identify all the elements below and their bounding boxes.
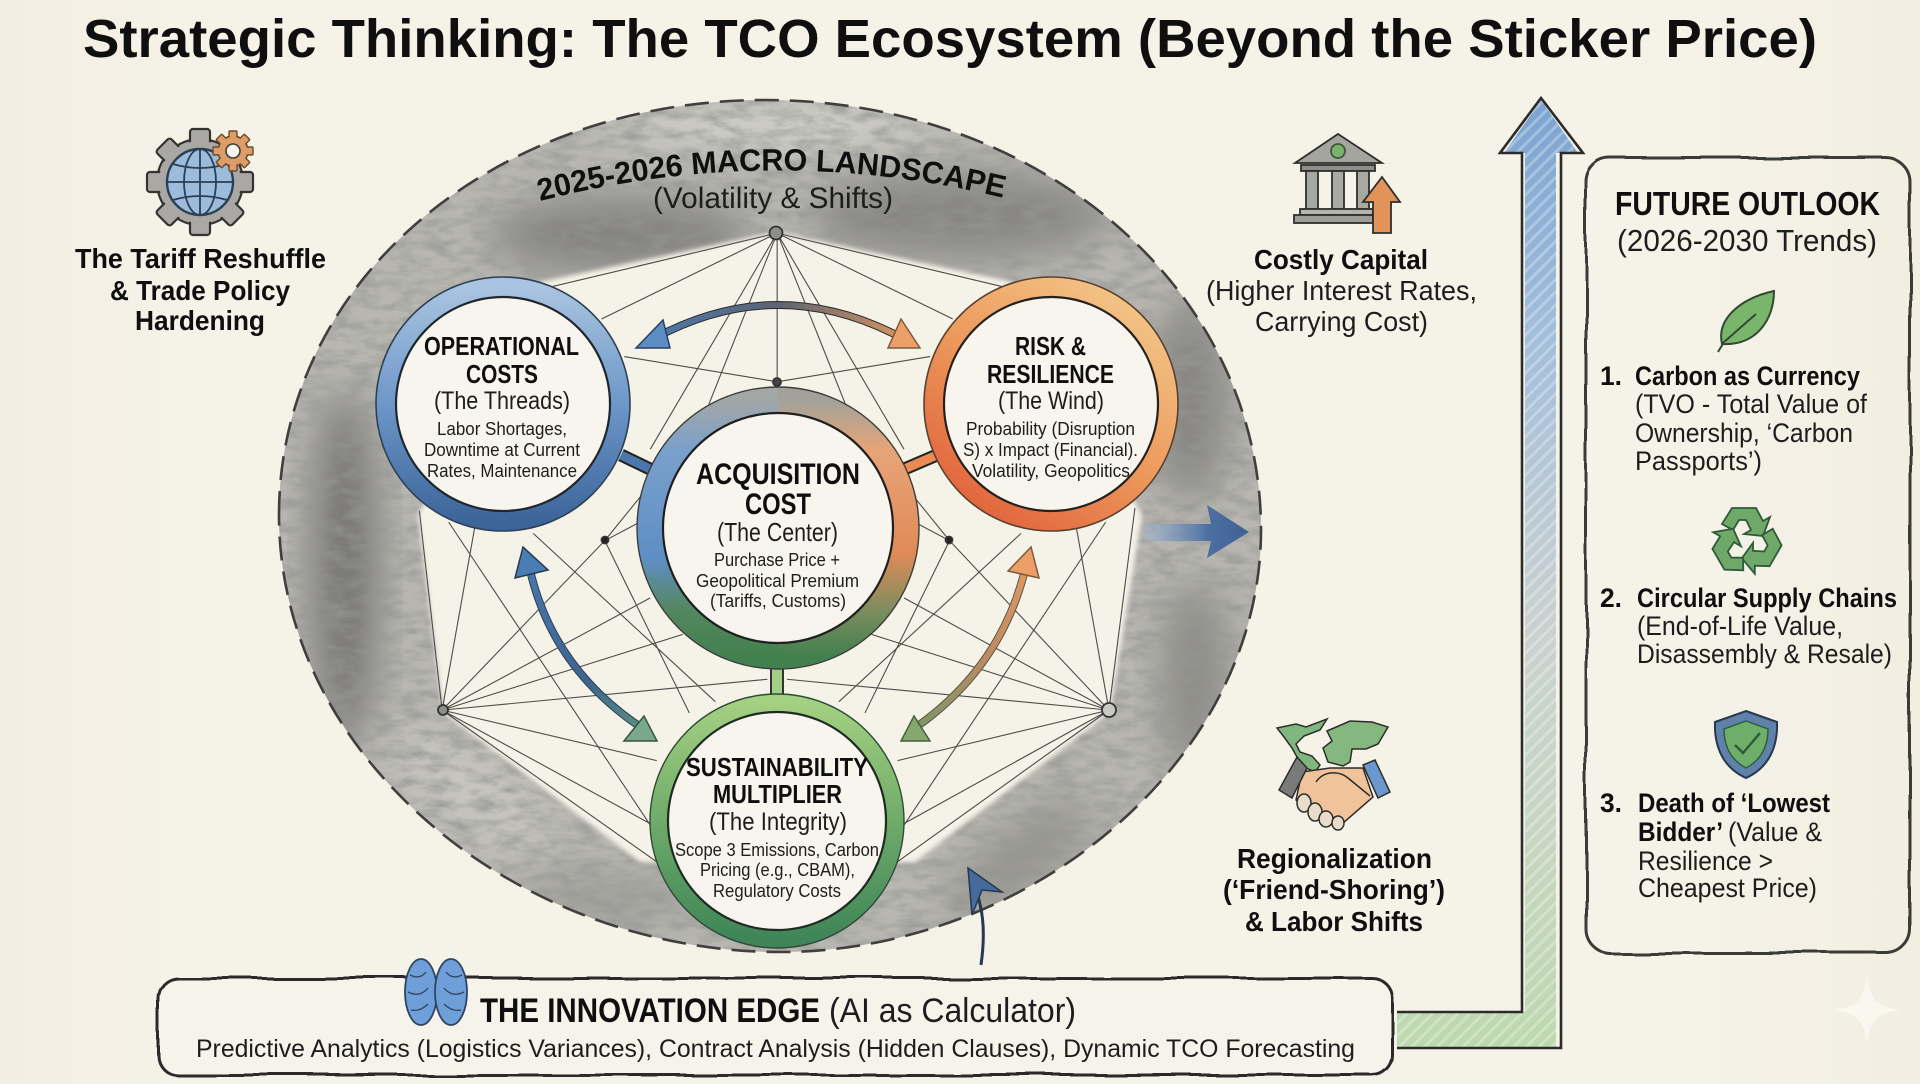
arrow: operational to risk (636, 305, 920, 348)
text: tariff reshuffle: The Tariff Reshuffle (75, 243, 326, 274)
item: death of lowest bidder: (Value & (1728, 817, 1822, 847)
dashed ecosystem outline (279, 100, 1261, 952)
panel: innovation edge (158, 959, 1392, 1075)
text: tariff reshuffle: & Trade Policy (110, 275, 290, 306)
arrow: pressure pushing right (1145, 505, 1249, 558)
circle: risk and resilience: Probability (Disruption (966, 418, 1135, 439)
panel: macro landscape ecosystem (278, 98, 1262, 954)
network lines (419, 233, 1135, 876)
item: carbon as currency: Carbon as Currency (1635, 361, 1860, 391)
item: death of lowest bidder: Death of ‘Lowest (1638, 788, 1830, 818)
circle: risk and resilience: S) x Impact (Financial). (963, 439, 1138, 460)
item: carbon as currency: Ownership, ‘Carbon (1635, 418, 1853, 448)
item: death of lowest bidder: 3. (1600, 788, 1622, 818)
panel: future outlook (1586, 158, 1910, 953)
circle: sustainability multiplier: Pricing (e.g., CBAM), (700, 859, 855, 880)
heading: future outlook (1615, 185, 1880, 258)
circle: operational costs (376, 277, 630, 531)
heading: future outlook: (2026-2030 Trends) (1617, 223, 1877, 258)
title: Strategic Thinking: The TCO Ecosystem (Beyond the Sticker Price) (83, 9, 1817, 69)
arrow: innovation into ecosystem (968, 868, 1002, 965)
text: tariff reshuffle: Hardening (135, 305, 265, 336)
item: carbon as currency (1600, 361, 1867, 476)
item: carbon as currency: (TVO - Total Value of (1635, 389, 1867, 419)
circle: risk and resilience: (The Wind) (998, 387, 1104, 415)
circle: acquisition cost: (Tariffs, Customs) (710, 590, 846, 611)
circle: risk and resilience (924, 277, 1178, 531)
item: circular supply chains: Disassembly & Resale) (1637, 639, 1892, 669)
icon: recycle arrows (1705, 508, 1787, 578)
text: costly capital: (Higher Interest Rates, (1206, 275, 1477, 306)
circle: sustainability multiplier: SUSTAINABILITY (686, 752, 868, 782)
text: regionalization: (‘Friend-Shoring’) (1223, 874, 1445, 905)
connectors between circles (621, 455, 937, 697)
icon: handshake over world map (1277, 719, 1390, 830)
watermark sparkle (1833, 976, 1901, 1044)
gray pencil band (270, 95, 1270, 960)
circle: operational costs: OPERATIONAL (424, 331, 579, 361)
circle: risk and resilience: RESILIENCE (987, 359, 1114, 389)
panel: innovation edge: (AI as Calculator) (829, 992, 1076, 1030)
text: costly capital (1206, 244, 1477, 337)
item: death of lowest bidder: Cheapest Price) (1638, 873, 1817, 903)
circle: sustainability multiplier: (The Integrity) (709, 808, 847, 836)
icon: brain (405, 959, 467, 1025)
text: tariff reshuffle (75, 243, 326, 336)
icon: leaf (1718, 291, 1774, 352)
item: carbon as currency: Passports’) (1635, 446, 1762, 476)
text: regionalization (1223, 843, 1445, 937)
circle: sustainability multiplier: MULTIPLIER (713, 779, 842, 809)
circle: acquisition cost (637, 387, 919, 669)
circle: operational costs: (The Threads) (434, 387, 570, 415)
circle: sustainability multiplier: Regulatory Costs (713, 880, 841, 901)
circle: operational costs: Labor Shortages, (437, 418, 567, 439)
arrow: operational to sustainability (515, 547, 657, 741)
panel: innovation edge: THE INNOVATION EDGE (480, 992, 820, 1030)
item: circular supply chains (1600, 583, 1897, 669)
text: regionalization: & Labor Shifts (1245, 906, 1423, 937)
circle: operational costs: Rates, Maintenance (427, 460, 577, 481)
arrow: risk to sustainability (901, 547, 1039, 741)
circle: acquisition cost: COST (745, 488, 811, 521)
circle: risk and resilience: RISK & (1015, 331, 1086, 361)
circle: acquisition cost: (The Center) (717, 517, 838, 547)
panel: innovation edge: Predictive Analytics (Logistics Variances), Contract Analysis (Hidden Clauses), Dynamic TCO Forecasting (196, 1035, 1355, 1063)
item: circular supply chains: (End-of-Life Value, (1637, 611, 1843, 641)
circle: acquisition cost: Geopolitical Premium (696, 570, 859, 591)
item: death of lowest bidder: Bidder’ (1638, 817, 1723, 847)
text: costly capital: Carrying Cost) (1255, 306, 1428, 337)
network nodes (438, 226, 1116, 717)
circle: sustainability multiplier (650, 694, 904, 948)
text: regionalization: Regionalization (1237, 843, 1432, 874)
heading: future outlook: FUTURE OUTLOOK (1615, 185, 1880, 222)
heading: macro landscape: (Volatility & Shifts) (653, 182, 893, 215)
icon: shield (1715, 711, 1777, 778)
item: carbon as currency: 1. (1600, 361, 1622, 391)
circle: operational costs: COSTS (466, 359, 538, 389)
circle: risk and resilience: Volatility, Geopolitics (972, 460, 1130, 481)
item: death of lowest bidder (1600, 788, 1830, 903)
item: death of lowest bidder: Resilience > (1638, 846, 1773, 876)
arrow: big rising trend arrow (1397, 98, 1583, 1048)
circle: acquisition cost: ACQUISITION (696, 458, 860, 491)
item: circular supply chains: 2. (1600, 583, 1622, 613)
circle: acquisition cost: Purchase Price + (714, 549, 840, 570)
icon: tariff gear and globe (147, 129, 253, 235)
text: costly capital: Costly Capital (1254, 244, 1428, 275)
circle: operational costs: Downtime at Current (424, 439, 580, 460)
icon: bank with rising arrow (1294, 134, 1400, 233)
heading: macro landscape: 2025-2026 MACRO LANDSCAPE (537, 149, 1006, 201)
circle: sustainability multiplier: Scope 3 Emissions, Carbon (675, 839, 879, 860)
